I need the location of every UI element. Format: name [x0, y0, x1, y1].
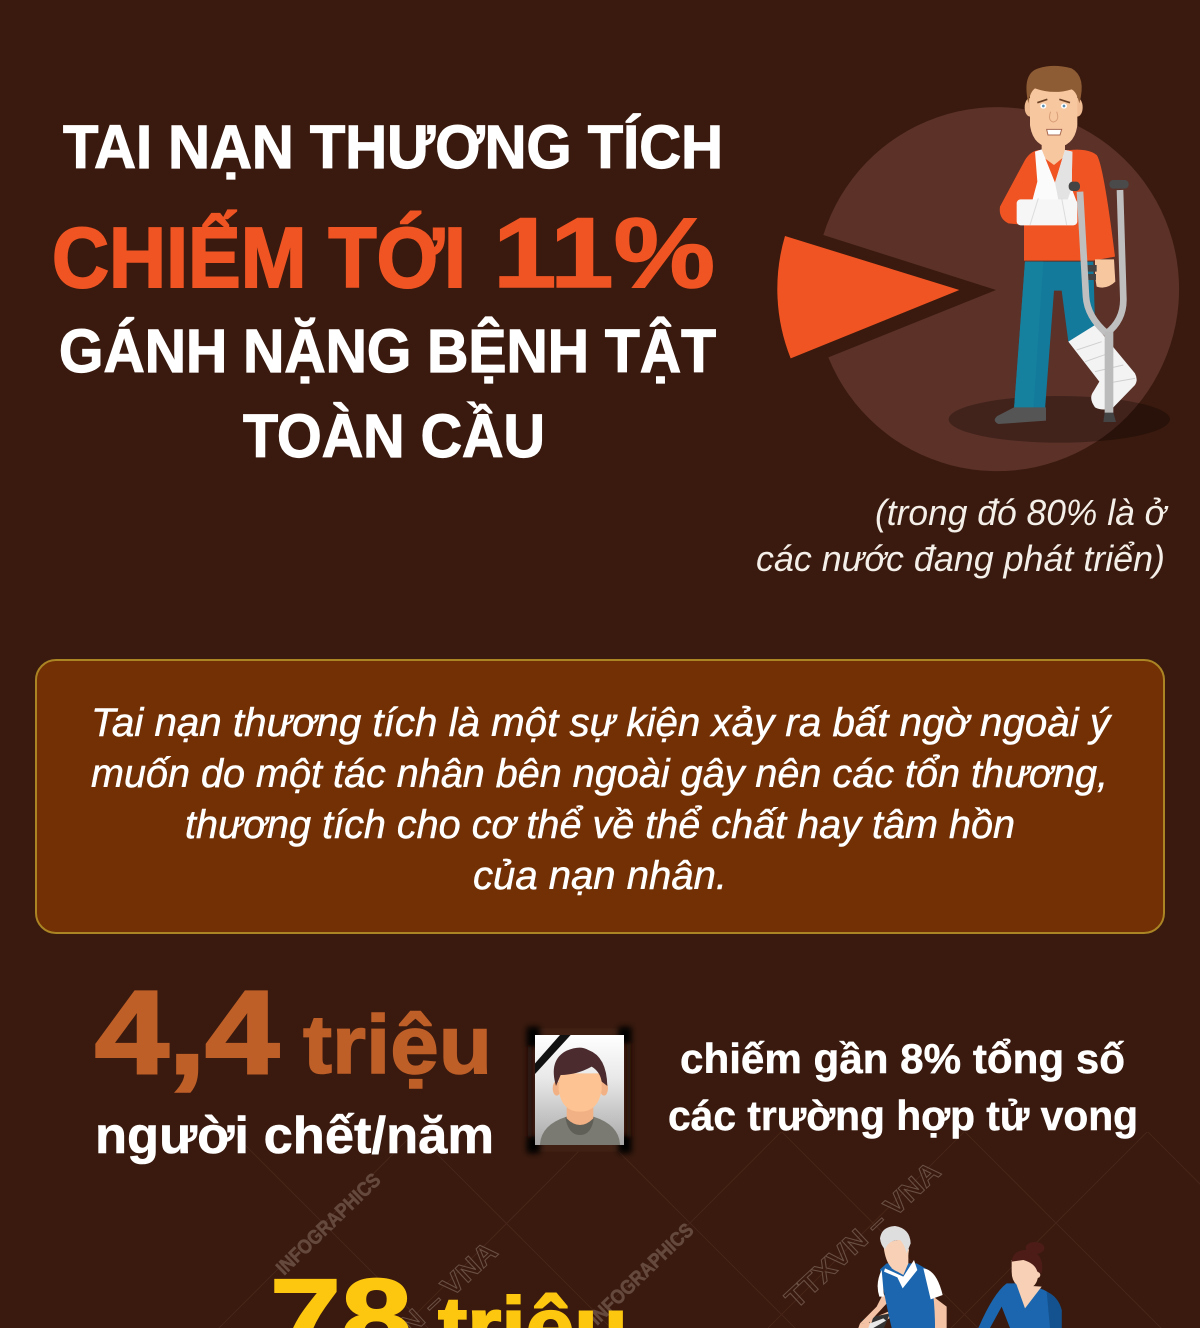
note: 80% in developing countries	[756, 492, 1169, 579]
panel: definition: muốn do một tác nhân bên ngoài gây nên các tổn thương,	[91, 752, 1108, 796]
watermark: INFOGRAPHICS left: INFOGRAPHICS	[272, 1169, 385, 1280]
note: 80% in developing countries: (trong đó 80% là ở	[875, 492, 1169, 533]
text: 8% of all deaths: các trường hợp tử vong	[668, 1092, 1138, 1139]
watermark: INFOGRAPHICS right: INFOGRAPHICS	[585, 1219, 698, 1328]
heading: main title: 11%	[493, 197, 715, 308]
note: 80% in developing countries: các nước đang phát triển)	[756, 538, 1165, 579]
pie chart: 11% slice	[777, 107, 1179, 471]
illustration: woman	[978, 1242, 1062, 1328]
heading: main title: CHIẾM TỚI	[52, 210, 466, 306]
illustration: elderly man	[858, 1226, 947, 1328]
stat: 4.4 million deaths per year	[95, 967, 494, 1165]
stat: 4.4 million deaths per year: người chết/năm	[95, 1107, 494, 1165]
stat: 4.4 million deaths per year: triệu	[303, 998, 492, 1091]
panel: definition: thương tích cho cơ thể về thể chất hay tâm hồn	[185, 803, 1015, 847]
watermark: TTXVN - VNA right: TTXVN – VNA	[779, 1155, 946, 1314]
heading: main title: TOÀN CẦU	[243, 402, 545, 470]
heading: main title: GÁNH NẶNG BỆNH TẬT	[59, 317, 716, 385]
panel: definition	[36, 660, 1164, 933]
panel: definition: của nạn nhân.	[473, 854, 727, 898]
panel: definition: Tai nạn thương tích là một sự kiện xảy ra bất ngờ ngoài ý	[91, 701, 1113, 745]
stat: 4.4 million deaths per year: 4,4	[95, 967, 279, 1099]
heading: main title	[52, 113, 723, 470]
text: 8% of all deaths: chiếm gần 8% tổng số	[680, 1035, 1125, 1082]
heading: main title: TAI NẠN THƯƠNG TÍCH	[63, 113, 723, 181]
illustration: injured man on crutches	[949, 66, 1170, 443]
icon: memorial portrait	[527, 1027, 632, 1153]
stat: 78 million	[270, 1256, 628, 1328]
text: 8% of all deaths	[668, 1035, 1138, 1139]
